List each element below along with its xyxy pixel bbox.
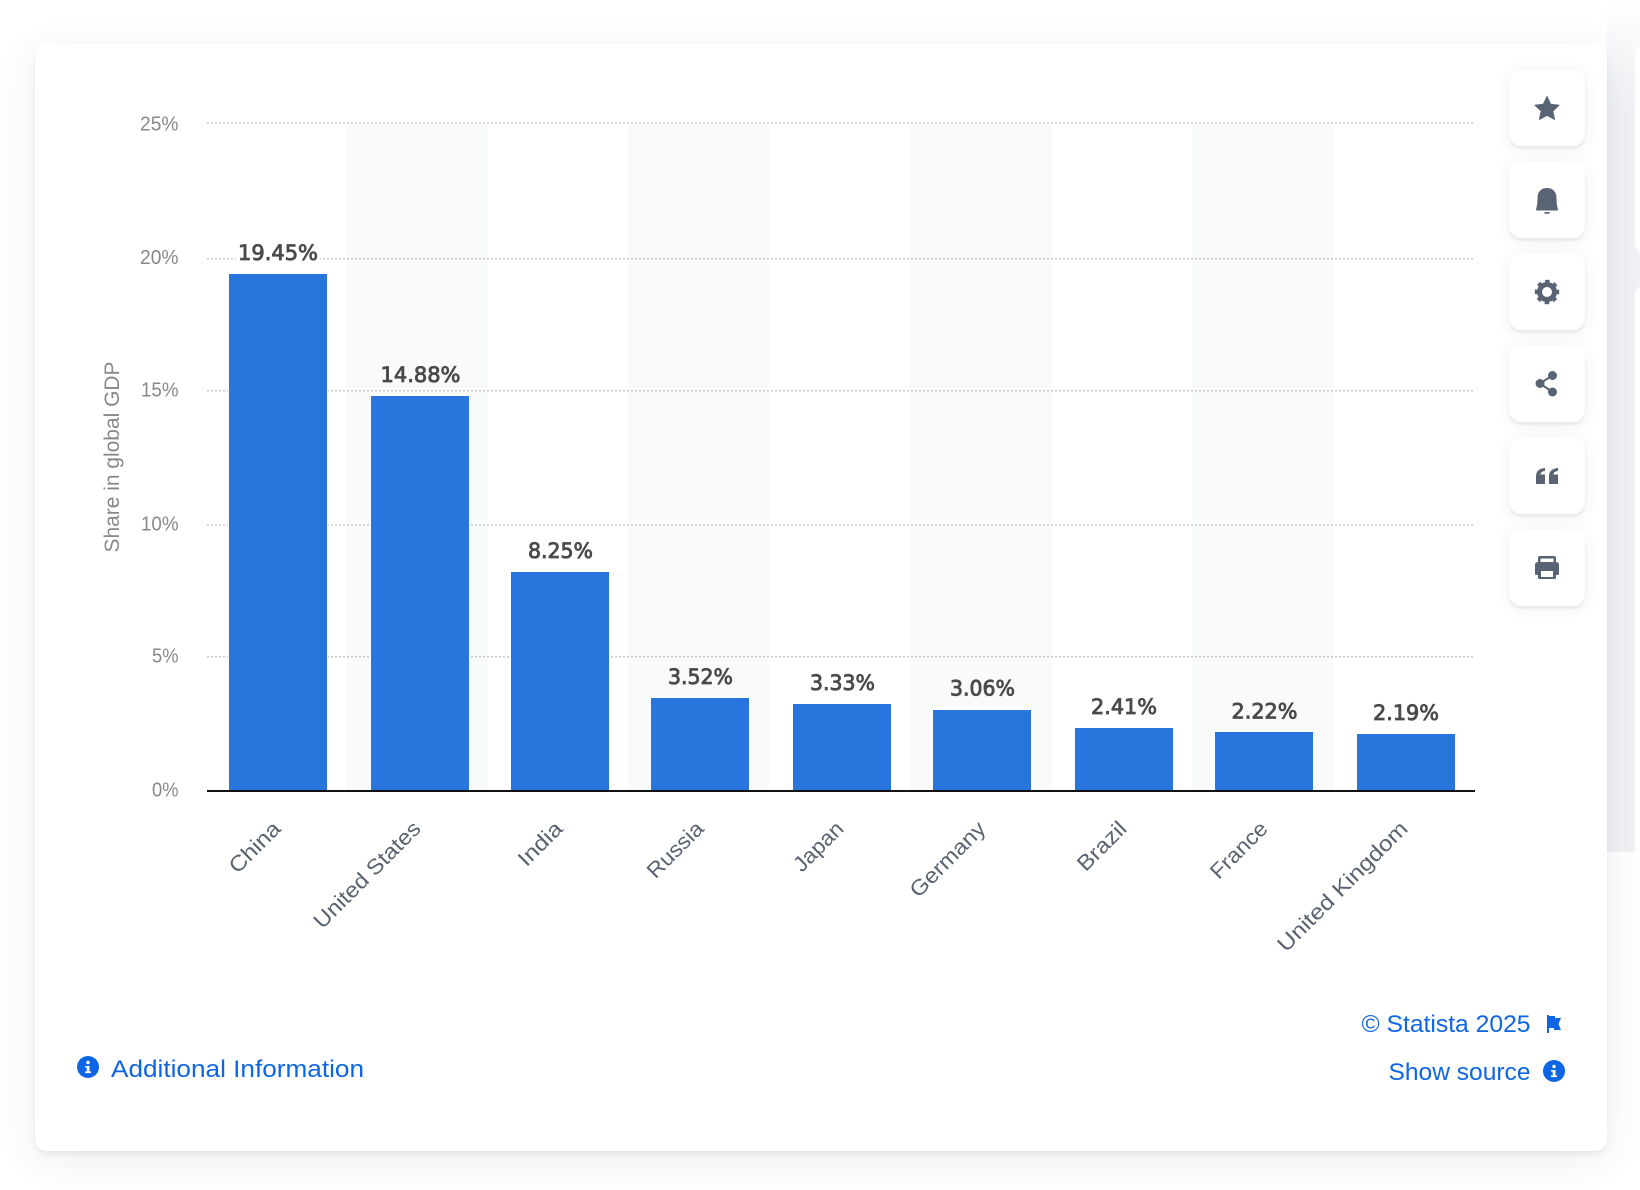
button: notification bell <box>1509 162 1585 238</box>
data labels: 14.88% <box>380 363 460 387</box>
y axis tick labels: 0% <box>152 778 178 802</box>
data labels: 2.22% <box>1232 700 1298 724</box>
y axis tick labels: 20% <box>140 246 178 269</box>
button: favourite star <box>1509 70 1585 146</box>
icon: share <box>1536 371 1557 396</box>
y axis tick labels <box>140 112 178 802</box>
y axis title: Share in global GDP <box>101 362 124 552</box>
icon: bell <box>1536 188 1558 214</box>
y axis tick labels: 5% <box>152 644 178 668</box>
icon: printer <box>1535 556 1559 579</box>
y axis tick labels: 15% <box>141 378 178 402</box>
x axis category labels: Brazil <box>1072 817 1132 876</box>
x axis category labels: India <box>513 817 568 871</box>
icon: quote marks <box>1536 468 1558 484</box>
x axis category labels <box>224 816 1413 957</box>
x axis category labels: China <box>224 817 286 878</box>
x axis category labels: United States <box>309 817 426 933</box>
neighbouring side card, bottom <box>1635 285 1640 852</box>
bars <box>229 274 1455 790</box>
data labels: 3.52% <box>668 665 733 689</box>
button: settings gear <box>1509 254 1585 330</box>
link: show source: Show source <box>1388 1059 1530 1086</box>
data labels: 19.45% <box>238 241 318 265</box>
x axis category labels: Russia <box>642 817 709 883</box>
y axis tick labels: 10% <box>141 512 178 536</box>
data labels <box>238 241 1439 725</box>
icon: gear <box>1534 280 1560 304</box>
alternating column bands <box>346 124 1334 790</box>
data labels: 8.25% <box>528 539 593 563</box>
neighbouring side card, top <box>1635 44 1640 254</box>
button: share <box>1509 346 1585 422</box>
icon: info, show source <box>1543 1060 1565 1082</box>
data labels: 2.41% <box>1091 695 1157 719</box>
x axis category labels: Japan <box>788 817 849 877</box>
y axis tick labels: 25% <box>140 112 178 136</box>
icon: star <box>1534 96 1560 120</box>
data labels: 3.06% <box>950 676 1015 700</box>
copyright: © Statista 2025 <box>1362 1011 1530 1038</box>
grid lines <box>207 123 1473 657</box>
button: cite quote <box>1509 438 1585 514</box>
baseline axis <box>207 790 1475 792</box>
data labels: 2.19% <box>1373 701 1439 725</box>
label halo <box>236 250 320 268</box>
x axis category labels: United Kingdom <box>1273 817 1413 957</box>
background strip <box>1607 0 1640 852</box>
x axis category labels: Germany <box>905 816 991 902</box>
icon: info, additional information <box>77 1056 99 1078</box>
data labels: 3.33% <box>810 671 875 695</box>
link: additional information: Additional Information <box>111 1056 364 1083</box>
icon: flag <box>1547 1015 1561 1033</box>
button: print <box>1509 530 1585 606</box>
x axis category labels: France <box>1205 817 1273 884</box>
